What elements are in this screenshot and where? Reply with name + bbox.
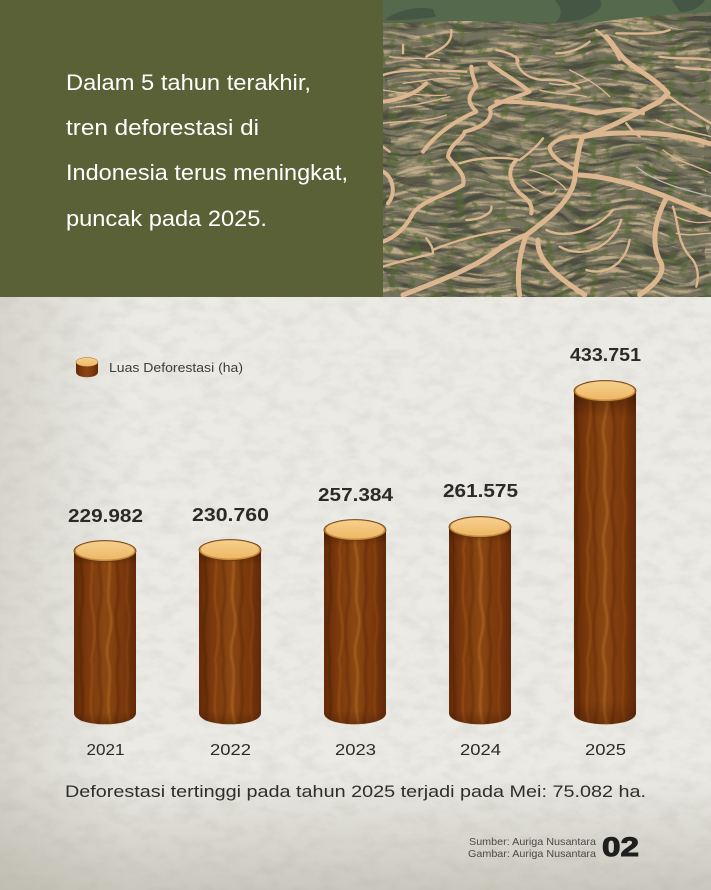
headline text: Dalam 5 tahun terakhir, — [66, 70, 311, 95]
forest band — [383, 0, 711, 23]
source credits — [468, 836, 596, 860]
bar 2022: 230.760 — [192, 504, 269, 525]
bar 2024: 2024 — [460, 742, 501, 759]
legend label: Luas Deforestasi (ha) — [109, 360, 243, 375]
bar 2025 — [570, 344, 641, 759]
caption: Deforestasi tertinggi pada tahun 2025 terjadi pada Mei: 75.082 ha. — [65, 782, 646, 801]
icon: log — [76, 358, 98, 377]
bar 2025: 2025 — [585, 742, 626, 759]
bar 2024 — [443, 480, 518, 759]
bar 2021: 229.982 — [68, 505, 143, 526]
legend — [76, 358, 243, 377]
chart: log bar chart — [68, 344, 641, 759]
headline text — [66, 70, 348, 231]
bar 2023: 257.384 — [318, 484, 394, 505]
panel: headline — [0, 0, 383, 297]
paper background — [0, 297, 711, 890]
bar 2023 — [318, 484, 394, 759]
source credits: Gambar: Auriga Nusantara — [468, 848, 596, 860]
bar 2022: 2022 — [210, 742, 251, 759]
bar 2024: 261.575 — [443, 480, 518, 501]
dirt roads — [383, 30, 711, 295]
bar 2021 — [68, 505, 143, 759]
bar 2021: 2021 — [86, 742, 124, 759]
source credits: Sumber: Auriga Nusantara — [469, 836, 596, 848]
page number: 02 — [602, 832, 639, 862]
photo: aerial view of cleared forest with dirt roads — [383, 0, 711, 297]
headline text: Indonesia terus meningkat, — [66, 160, 348, 185]
headline text: tren deforestasi di — [66, 115, 259, 140]
bar 2022 — [192, 504, 269, 759]
headline text: puncak pada 2025. — [66, 206, 267, 231]
bar 2023: 2023 — [335, 742, 376, 759]
bar 2025: 433.751 — [570, 344, 641, 365]
